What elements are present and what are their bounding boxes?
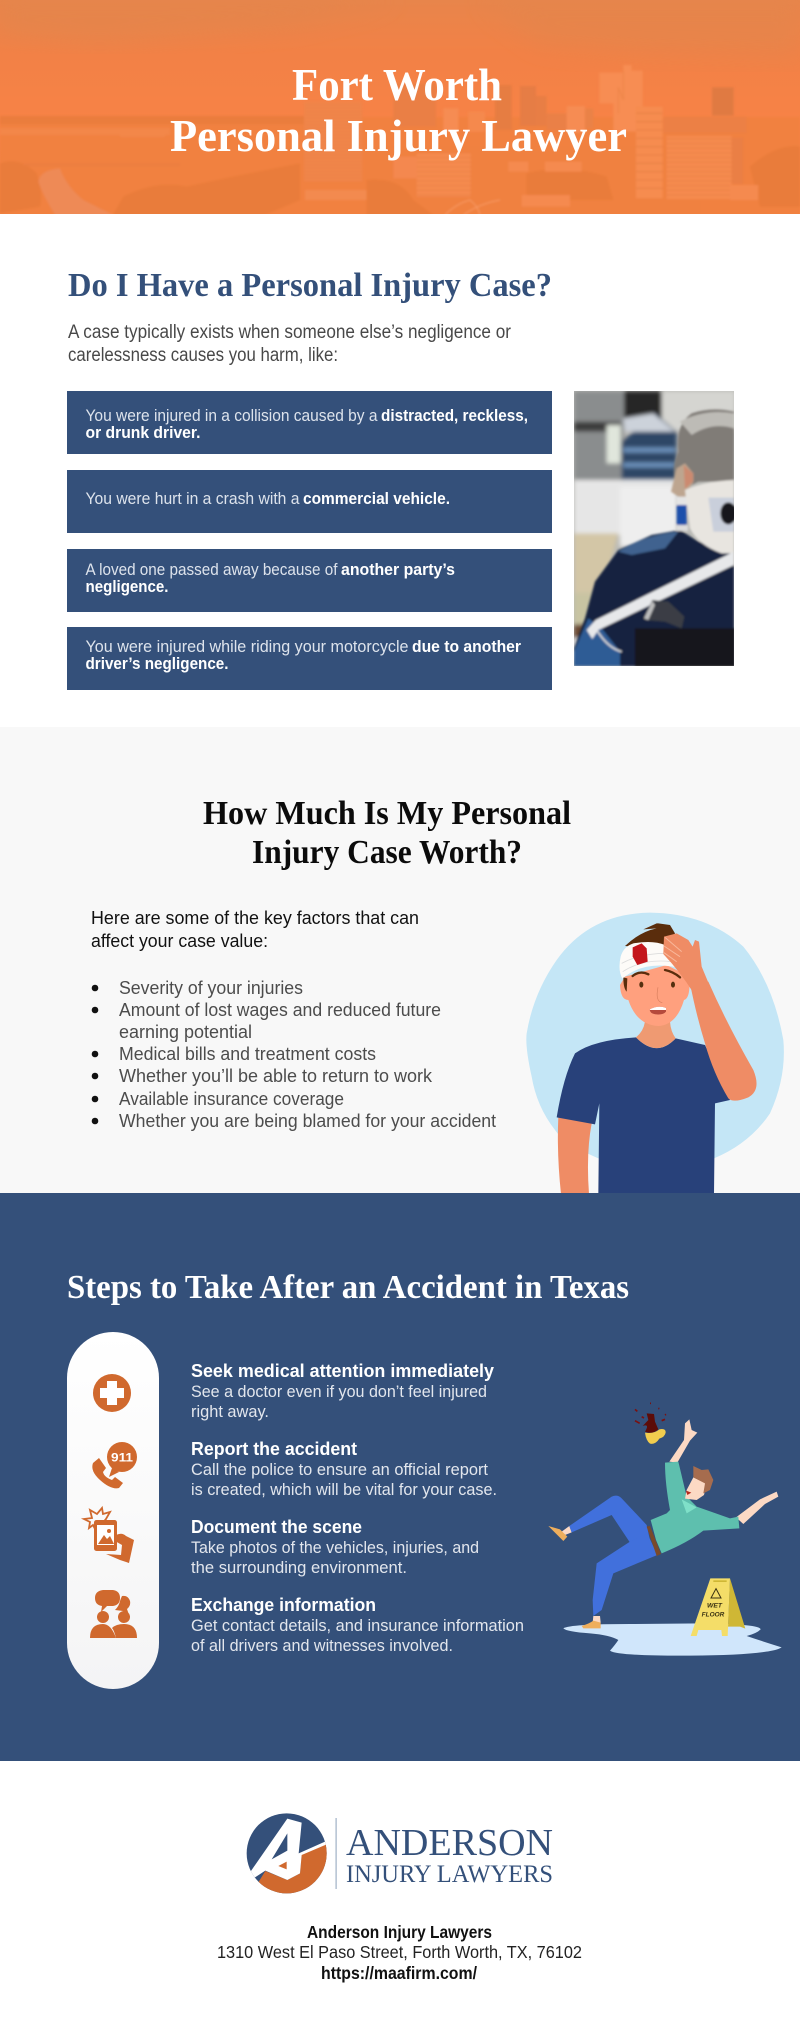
title: Fort Worth: [292, 59, 502, 110]
factors intro: affect your case value:: [91, 930, 268, 951]
step: report the accident: Call the police to ensure an official report: [191, 1460, 488, 1479]
illustration: man slipping on wet floor: [548, 1403, 782, 1656]
icon: people talking: [90, 1590, 137, 1638]
callout: collision: [67, 391, 552, 454]
logo: [246, 1813, 552, 1894]
callout: loved one: [67, 549, 552, 612]
heading: steps: Steps to Take After an Accident in Texas: [67, 1269, 629, 1306]
icon: 911 call: [92, 1442, 137, 1488]
factors list: Whether you’ll be able to return to work: [119, 1065, 433, 1086]
contact details: https://maafirm.com/: [321, 1963, 477, 1983]
section: steps after an accident: [0, 1193, 800, 1761]
illustration: man slipping on wet floor: FLOOR: [702, 1611, 725, 1618]
contact details: Anderson Injury Lawyers: [307, 1922, 492, 1942]
logo: ANDERSON: [346, 1822, 553, 1864]
callout: commercial vehicle: You were hurt in a crash with a: [86, 490, 300, 508]
intro text: A case typically exists when someone else’s negligence or: [68, 322, 512, 343]
callout: collision: You were injured in a collision caused by a: [86, 407, 378, 425]
title: [170, 59, 627, 161]
callout: collision: distracted, reckless,: [381, 407, 528, 425]
factors list: earning potential: [119, 1021, 252, 1042]
step: exchange information: Get contact details, and insurance information: [191, 1616, 524, 1635]
callout: commercial vehicle: [67, 470, 552, 533]
step: exchange information: of all drivers and witnesses involved.: [191, 1636, 453, 1655]
factors list: Available insurance coverage: [119, 1088, 344, 1109]
factors list: Medical bills and treatment costs: [119, 1043, 376, 1064]
header banner: [0, 0, 800, 227]
heading: case worth: Injury Case Worth?: [252, 834, 522, 871]
callout: loved one: another party’s: [341, 561, 455, 579]
factors intro: [91, 907, 419, 951]
factors list: Amount of lost wages and reduced future: [119, 999, 441, 1020]
icon: 911 call: 911: [111, 1450, 133, 1464]
step: report the accident: [191, 1438, 497, 1499]
factors list: Severity of your injuries: [119, 977, 303, 998]
section: case worth: [0, 727, 800, 1194]
factors list: Whether you are being blamed for your accident: [119, 1110, 496, 1131]
illustration: injured man: [526, 913, 784, 1194]
intro text: carelessness causes you harm, like:: [68, 345, 338, 366]
intro text: [68, 322, 512, 366]
factors intro: Here are some of the key factors that can: [91, 907, 419, 928]
header skyline background: [0, 0, 800, 227]
callout: collision: or drunk driver.: [86, 424, 200, 442]
factors list: [92, 977, 496, 1131]
heading: do I have a case: Do I Have a Personal Injury Case?: [68, 267, 552, 304]
step: seek medical attention: See a doctor even if you don’t feel injured: [191, 1382, 487, 1401]
callout: motorcycle: due to another: [412, 638, 522, 656]
section: footer: [218, 1813, 582, 1982]
logo: INJURY LAWYERS: [346, 1859, 553, 1888]
step: document the scene: the surrounding environment.: [191, 1558, 407, 1577]
step: seek medical attention: [191, 1360, 495, 1421]
callout: loved one: A loved one passed away because of: [86, 561, 338, 579]
contact details: 1310 West El Paso Street, Forth Worth, TX, 76102: [217, 1942, 582, 1962]
step: exchange information: [191, 1594, 524, 1655]
heading: case worth: How Much Is My Personal: [203, 795, 571, 832]
step: exchange information: Exchange information: [191, 1594, 376, 1615]
step: seek medical attention: right away.: [191, 1402, 269, 1421]
section: do I have a case: [67, 272, 734, 690]
heading: case worth: [203, 795, 571, 871]
step: report the accident: is created, which will be vital for your case.: [191, 1480, 497, 1499]
callout: commercial vehicle: commercial vehicle.: [303, 490, 450, 508]
panel: icon pill: [67, 1332, 159, 1689]
callout: motorcycle: [67, 627, 552, 690]
step: document the scene: Take photos of the vehicles, injuries, and: [191, 1538, 479, 1557]
step: document the scene: [191, 1516, 479, 1577]
callout: motorcycle: You were injured while riding your motorcycle: [86, 638, 408, 656]
callout: motorcycle: driver’s negligence.: [86, 655, 228, 673]
illustration: man slipping on wet floor: WET: [707, 1602, 723, 1609]
callout: loved one: negligence.: [86, 578, 168, 596]
icon: phone photo: [84, 1508, 134, 1563]
photo: man in neck brace: [574, 391, 736, 667]
step: seek medical attention: Seek medical attention immediately: [191, 1360, 495, 1381]
step: report the accident: Report the accident: [191, 1438, 357, 1459]
contact details: [217, 1922, 582, 1983]
step: document the scene: Document the scene: [191, 1516, 362, 1537]
icon: medical cross: [93, 1374, 131, 1412]
title: Personal Injury Lawyer: [170, 110, 627, 161]
